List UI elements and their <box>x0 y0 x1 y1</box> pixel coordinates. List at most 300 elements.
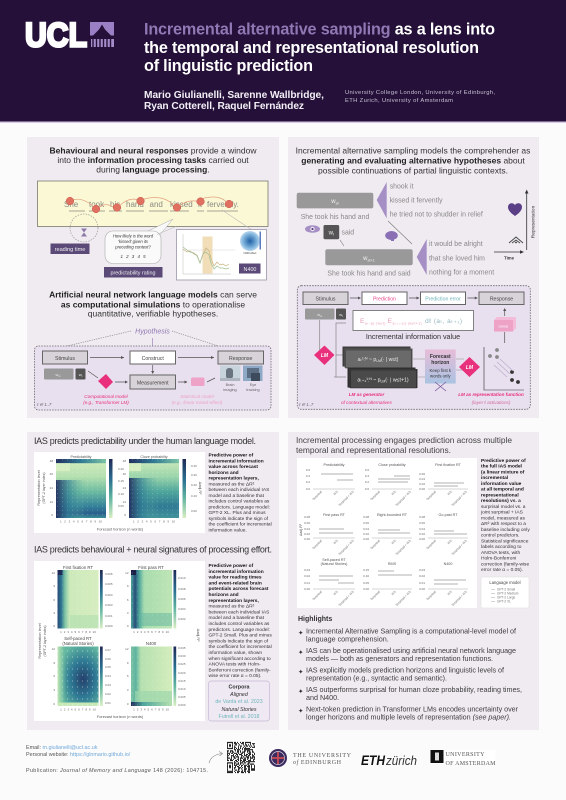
caption: model comparison: surprisal model vs. a <box>481 504 526 510</box>
equation box: E <box>360 318 364 325</box>
chart: first pass RT <box>304 513 355 556</box>
heatmap: N400: 0.035 <box>178 646 186 650</box>
caption: behavioural figure: when significant according to <box>208 656 271 662</box>
diagram: stimulus construct response: Computational model <box>84 394 129 399</box>
diagram: stimulus construct response: Stimulus <box>55 356 75 362</box>
chart: RMS: 0.15 <box>363 568 369 572</box>
heading: IAS models: possible continuations of partial linguistic contexts. <box>318 165 508 175</box>
chart: right-bounded RT: 0.02 <box>363 532 369 536</box>
chart: first fixation RT: Surprisal <box>426 490 437 501</box>
LM as generator: aₜ₊₁¹:ᴺ ~ p <box>357 378 381 384</box>
heatmap: N400: 0.010 <box>178 687 186 691</box>
diagram: stimulus construct response: ℓ ∈ 1..7 <box>36 402 52 407</box>
title: the temporal and representational resolution <box>144 39 479 57</box>
speech bubble: rating question <box>105 219 173 264</box>
arrow to QR code <box>209 752 222 763</box>
label: reading time <box>50 244 90 254</box>
heatmap: self-paced RT: 0 <box>53 702 55 706</box>
legend: language model: GPT-2 Small <box>497 588 515 592</box>
diagram: context w≤t with continuations: shook it <box>390 183 414 190</box>
heading: incremental processing: temporal and representational resolutions. <box>296 445 451 455</box>
caption: predictability figure: Predictive power of <box>208 452 254 458</box>
legend: language model: GPT-2 Large <box>497 596 515 600</box>
panel: multiple resolutions and highlights <box>288 432 539 730</box>
heading: incremental processing: Incremental processing engages prediction across multiple <box>296 435 512 445</box>
chart: first pass RT: 0.06 <box>304 521 310 525</box>
heatmap: first fixation RT: 0.001 <box>105 614 113 618</box>
caption: model comparison: joint surprisal + IAS <box>480 510 524 516</box>
logo: University of Amsterdam: OF AMSTERDAM <box>446 761 496 767</box>
reading sentence box: took <box>89 200 105 209</box>
chart: right-bounded RT: 0.06 <box>363 521 369 525</box>
caption: predictability figure: information value. <box>208 527 247 533</box>
heatmap: cloze probability: 12 <box>123 500 126 504</box>
heading: artificial neural network models: Artificial neural network language models can serve <box>49 290 257 300</box>
reading sentence box: hand <box>126 200 144 209</box>
diagram: stimulus construct response: Response <box>229 356 252 362</box>
chart: go-past RT: 0.00 <box>419 537 425 541</box>
chart: first fixation RT: 0.04 <box>419 477 425 481</box>
caption: model comparison: ANOVA tests, with <box>481 550 521 556</box>
chart: RMS: IAS <box>390 590 397 596</box>
caption: behavioural figure: between each individual IAS <box>208 609 270 615</box>
diagram: context w≤t+1 with continuations: nothing for a moment <box>429 270 494 276</box>
affiliations: University College London, University of Edinburgh, <box>345 90 495 96</box>
current word w_t: w <box>329 230 333 236</box>
reading sentence box: it <box>198 200 203 209</box>
chart: cloze probability <box>365 463 412 507</box>
chart: right-bounded RT: Surprisal <box>370 539 381 550</box>
caption: behavioural figure <box>208 563 272 679</box>
corpora box: Futrell et al. 2018 <box>219 714 260 720</box>
corpora box: de Varda et al. 2023 <box>215 699 263 705</box>
caption: predictability figure: representation layers, <box>208 476 259 482</box>
chart: go-past RT: IAS <box>446 539 453 545</box>
equation box: aₜ~p(·|w≤t) <box>365 322 385 326</box>
heatmap: self-paced RT: 0.06 <box>105 657 111 661</box>
caption: model comparison: incremental <box>481 475 508 481</box>
chart: cloze probability: Surprisal + IAS <box>395 490 412 507</box>
highlights: ✦ <box>298 629 304 637</box>
caption: model comparison: Predictive power of <box>481 458 526 464</box>
diagram: stimulus construct response: imaging <box>223 388 237 392</box>
diagram: context w≤t+1 with continuations: it would be alright <box>429 241 483 248</box>
chart: first pass RT: First pass RT <box>323 513 346 517</box>
heatmap: first fixation RT: 1 2 3 4 5 6 7 8 9 10 <box>60 630 96 634</box>
chart: N400: 0.00 <box>419 587 425 591</box>
LM as generator <box>314 320 418 405</box>
legend: language model <box>481 577 529 608</box>
heatmap: self-paced RT: 0.05 <box>105 665 111 669</box>
chart: cloze probability: 0.2 <box>365 480 369 484</box>
LM as generator: (· | w≤t+1) <box>385 378 409 384</box>
footer: contact and publication: Email: m.giulianelli@ucl.ac.uk <box>26 745 98 751</box>
caption: behavioural figure: value for reading times <box>208 575 262 581</box>
affiliations: ETH Zurich, University of Amsterdam <box>345 98 453 104</box>
heatmap: self-paced RT: 0.03 <box>105 683 111 687</box>
caption: model comparison: the full IAS model <box>481 464 522 470</box>
heatmap: first pass RT: 3 <box>127 611 129 615</box>
heatmap: first fixation RT <box>52 565 113 634</box>
heatmap: predictability <box>50 455 124 524</box>
heatmap: first fixation RT: 0 <box>53 624 55 628</box>
heatmap: N400: 12 <box>125 647 129 651</box>
chart: predictability: IAS <box>332 490 339 496</box>
chart: go-past RT: 0.08 <box>419 515 425 519</box>
title <box>144 20 495 75</box>
caption: model comparison: labels according to <box>481 544 522 550</box>
diagram: context w≤t with continuations: ≤t <box>336 202 340 206</box>
icon: linear model cube: Linear <box>498 324 509 328</box>
heading: IAS predicts behavioural: IAS predicts behavioural + neural signatures of processing effort. <box>34 544 272 554</box>
forecast horizon box: words only <box>430 374 451 378</box>
chart: RMS: RMS <box>388 562 397 566</box>
caption: model comparison: representational <box>481 492 519 498</box>
heatmap: self-paced RT: 0.04 <box>105 674 111 678</box>
speech bubble: rating question: How likely is the word <box>113 234 154 238</box>
heatmap: cloze probability: 0.40 <box>191 464 197 468</box>
icon: statistical model <box>191 378 204 386</box>
panel: behavioural and neural responses <box>27 137 279 418</box>
highlights: ✦ <box>298 688 304 696</box>
figure: predictability heatmaps: Representation level <box>36 470 41 506</box>
chart: N400: Surprisal <box>426 590 437 601</box>
caption: behavioural figure: measured as the ΔR² <box>208 604 255 610</box>
diagram: stimulus construct response: Statistical model <box>180 394 215 399</box>
heading: IAS models <box>296 145 530 175</box>
axes: representation and time: Representation <box>530 205 536 238</box>
heading: behavioural responses <box>50 146 257 174</box>
current word w_t <box>324 221 412 246</box>
caption: behavioural figure: Predictive power of <box>208 563 254 569</box>
heatmap: predictability: 0.15 <box>118 479 124 483</box>
heatmap: first pass RT: 0 <box>127 624 129 628</box>
diagram: prediction pipeline: w <box>317 312 320 317</box>
caption: model comparison <box>480 458 530 573</box>
heatmap: first fixation RT: 0.004 <box>105 593 113 597</box>
logo: University of Amsterdam: UNIVERSITY <box>446 752 485 758</box>
heatmap: self-paced RT: (Natural Stories) <box>62 641 94 646</box>
caption: model comparison: Statistical significance <box>481 538 529 544</box>
reading sentence box: She <box>64 200 79 209</box>
chart: first pass RT: Surprisal <box>312 539 323 550</box>
highlights: ✦ <box>298 648 304 656</box>
heatmap: N400: 0.020 <box>178 671 186 675</box>
current word w_t: said <box>342 230 354 236</box>
equation box <box>353 310 474 330</box>
label: hypothesis with dashed arrows: Hypothesis <box>135 328 170 336</box>
heatmap: cloze probability: Cloze probability <box>140 455 168 459</box>
chart: self-paced RT: (Natural Stories) <box>321 562 347 566</box>
chart: RMS: 0.05 <box>363 581 369 585</box>
caption: predictability figure: predictors. Language model: <box>208 504 270 510</box>
diagram: prediction pipeline: Prediction <box>373 296 396 302</box>
chart: first fixation RT: Surprisal + IAS <box>451 490 468 507</box>
diagram: context w≤t with continuations: he tried not to shudder in relief <box>390 212 483 219</box>
caption: behavioural figure: ANOVA tests with Holm- <box>208 662 261 668</box>
caption: behavioural figure: incremental information <box>208 569 264 575</box>
figure: model comparison charts: Δadj.R² <box>299 523 303 536</box>
equation box: dℓ (aₜ, aₜ₊₁) <box>425 318 462 325</box>
LM as representation function: LM <box>466 365 474 371</box>
diagram: stimulus construct response: ≤t <box>58 375 61 378</box>
legend: language model: GPT-2 Medium <box>497 592 519 596</box>
title: of linguistic prediction <box>144 57 313 75</box>
chart: first fixation RT: 0.06 <box>419 472 425 476</box>
caption: behavioural figure: symbols indicate the sign of <box>208 638 269 644</box>
chart: first fixation RT: 0.02 <box>419 482 425 486</box>
diagram: context w≤t with continuations <box>297 182 483 221</box>
authors: Ryan Cotterell, Raquel Fernández <box>144 101 304 112</box>
chart: predictability: Predictability <box>324 463 345 467</box>
footer: contact and publication: Personal website: https://glnmario.github.io/ <box>26 752 131 758</box>
heatmap: N400: 0.000 <box>178 703 186 707</box>
heatmap: predictability: 0.05 <box>118 504 124 508</box>
heatmap: first pass RT: 1 2 3 4 5 6 7 8 9 10 <box>133 630 169 634</box>
chart: RMS: 0.10 <box>363 574 369 578</box>
chart: N400: 0.02 <box>419 574 425 578</box>
chart: cloze probability: Close probability <box>378 463 406 467</box>
heatmap: self-paced RT: 1 2 3 4 5 6 7 8 9 10 <box>60 708 96 712</box>
photo: eye tracking <box>243 366 262 381</box>
caption: model comparison: Holm-Bonferroni <box>481 556 516 562</box>
chart: N400 waveform: N400 <box>244 267 256 273</box>
chart: first fixation RT: IAS <box>446 490 453 496</box>
chart: self-paced RT: 0.03 <box>304 568 310 572</box>
chart: right-bounded RT: 0.08 <box>363 515 369 519</box>
figure: behavioural and neural heatmaps: Forecast horizon (n words) <box>97 714 144 719</box>
heatmap: first pass RT: 0.002 <box>178 617 186 621</box>
heatmap: cloze probability: 0 <box>124 513 126 517</box>
label: predictability rating: predictability rating <box>111 270 155 276</box>
chart: first pass RT: 0.04 <box>304 527 310 531</box>
chart: predictability: 0.0 <box>306 487 310 491</box>
header banner <box>0 0 566 123</box>
forecast horizon box: horizon <box>431 360 449 366</box>
corpora box: Aligned <box>229 692 249 698</box>
axes: representation and time <box>494 190 536 260</box>
chart: first pass RT: IAS <box>332 539 339 545</box>
caption: model comparison: resolutions) vs. a <box>481 498 521 504</box>
heatmap: N400: 0.015 <box>178 679 186 683</box>
heading: incremental processing <box>296 435 512 455</box>
label: reading time: reading time <box>55 247 85 253</box>
caption: predictability figure: the coefficient for incremental <box>208 522 272 528</box>
icon: eye <box>305 225 320 233</box>
diagram: stimulus construct response <box>34 346 271 410</box>
chart: predictability <box>306 463 355 507</box>
LM as representation function <box>458 347 524 405</box>
chart: cloze probability: Surprisal <box>370 490 381 501</box>
heatmap: cloze probability: 48 <box>123 459 126 463</box>
heading: IAS models: generating and evaluating alternative hypotheses about <box>301 155 525 165</box>
chart: first pass RT: 0.02 <box>304 532 310 536</box>
caption: model comparison: (a linear mixture of <box>481 470 525 476</box>
highlights: ✦ <box>298 668 304 676</box>
heading: IAS models: Incremental alternative sampling models the comprehender as <box>296 145 530 155</box>
affiliations <box>345 90 495 104</box>
corpora box: Corpora <box>229 684 250 690</box>
chart: predictability: Surprisal <box>312 490 323 501</box>
logo: ETH Zurich: zürich <box>385 754 417 768</box>
diagram: prediction pipeline: Response <box>490 296 513 302</box>
highlights: Incremental Alternative Sampling is a computational-level model of <box>306 626 516 636</box>
chart: predictability: 0.2 <box>306 480 310 484</box>
heatmap: N400: 0.030 <box>178 654 186 658</box>
highlights: language comprehension. <box>306 634 389 644</box>
heading: artificial neural network models <box>49 290 257 319</box>
chart: self-paced RT: IAS <box>332 590 339 596</box>
chart: N400: Surprisal + IAS <box>451 590 468 607</box>
chart: predictability: 0.4 <box>306 474 310 478</box>
chart: go-past RT: 0.06 <box>419 521 425 525</box>
icon: syntax tree mountain <box>509 237 523 243</box>
heatmap: N400: 3 <box>127 688 129 692</box>
heatmap: predictability: Predictability <box>71 455 92 459</box>
chart: right-bounded RT: Right-bounded RT <box>377 513 408 517</box>
logo: University of Edinburgh <box>269 749 352 767</box>
footer: contact and publication <box>26 745 208 774</box>
heatmap: first pass RT: First pass RT <box>138 565 164 570</box>
heatmap: self-paced RT: 0.01 <box>105 701 111 705</box>
label: hypothesis with dashed arrows <box>67 328 218 350</box>
caption: predictability figure: includes control variables as <box>208 498 270 504</box>
reading sentence box: and <box>150 200 163 209</box>
heading: IAS predicts predictability: IAS predicts predictability under the human language model. <box>34 436 256 446</box>
LM as generator: aₜ¹:ᴺ ~ p <box>358 357 376 363</box>
heatmap: first pass RT: 9 <box>127 584 129 588</box>
highlights: IAS explicitly models prediction horizons and linguistic levels of <box>306 666 504 674</box>
chart: right-bounded RT <box>363 513 412 556</box>
caption: behavioural figure: includes control variables as <box>208 621 270 627</box>
caption: predictability figure: horizons and <box>208 470 239 476</box>
heatmap: self-paced RT: 0.02 <box>105 692 111 696</box>
chart: first fixation RT <box>419 463 468 507</box>
panel: incremental alternative sampling <box>288 137 539 418</box>
caption: behavioural figure: and event-related brain <box>208 580 262 586</box>
heatmap: cloze probability: 0.20 <box>191 483 197 487</box>
heatmap: self-paced RT: 9 <box>53 661 55 665</box>
figure: behavioural and neural heatmaps <box>34 561 205 721</box>
heatmap: predictability: 24 <box>50 486 53 490</box>
title: Incremental alternative sampling as a lens into <box>144 20 495 38</box>
diagram: stimulus construct response: Eye <box>250 383 256 387</box>
LM as generator: LM <box>321 353 329 359</box>
heatmap: N400 <box>125 641 186 712</box>
caption: behavioural figure: information value, shown <box>208 650 262 656</box>
figure: predictability heatmaps: (GPT-2 layer index) <box>42 472 46 504</box>
heatmap: N400: 0.025 <box>178 662 186 666</box>
diagram: prediction pipeline: Stimulus <box>316 296 336 302</box>
diagram: prediction pipeline <box>297 286 530 409</box>
heatmap: first fixation RT: 0.006 <box>105 572 113 576</box>
caption: predictability figure: incremental information <box>208 458 264 464</box>
heatmap: N400: 0.005 <box>178 695 186 699</box>
heatmap: N400: 1 2 3 4 5 6 7 8 9 10 <box>133 708 169 712</box>
LM as generator: LM as generator <box>349 392 384 397</box>
chart: self-paced RT: 0.01 <box>304 581 310 585</box>
diagram: context w≤t+1 with continuations: that she loved him <box>429 255 485 262</box>
caption: model comparison: model, measured as <box>481 516 525 522</box>
diagram: context w≤t+1 with continuations: ≤t+1 <box>367 258 375 262</box>
heatmap: self-paced RT: 3 <box>53 688 55 692</box>
icon: brain <box>385 231 398 241</box>
chart: predictability: 0.6 <box>306 468 310 472</box>
reading sentence box: kissed <box>170 200 193 209</box>
chart: right-bounded RT: 0.00 <box>363 537 369 541</box>
figure: predictability heatmaps <box>34 452 205 533</box>
legend: language model: Language model <box>489 580 521 585</box>
heatmap: first pass RT <box>125 565 186 634</box>
icon: linear model cube <box>494 317 516 332</box>
heatmap: first fixation RT: 12 <box>52 571 55 575</box>
diagram: stimulus construct response: (e.g., linear mixed-effect) <box>172 400 223 405</box>
forecast horizon box: Forecast <box>430 354 451 360</box>
chart: N400: N400 <box>444 562 452 566</box>
chart: RMS: Surprisal <box>370 590 381 601</box>
highlights: longer horizons and multiple levels of representation (see paper). <box>306 712 511 722</box>
highlights: representation (e.g., syntactic and semantic). <box>306 674 447 682</box>
diagram: context w≤t with continuations: w <box>331 199 336 205</box>
diagram: stimulus construct response: w <box>79 372 82 377</box>
heatmap: first fixation RT: 9 <box>53 584 55 588</box>
diagram: stimulus construct response: Brain <box>226 383 234 387</box>
heatmap: first pass RT: 0.004 <box>178 607 186 611</box>
heatmap: first pass RT: 0.006 <box>178 597 186 601</box>
caption: predictability figure: value across forecast <box>208 464 258 470</box>
heatmap: first fixation RT: 0.005 <box>105 582 113 586</box>
caption: behavioural figure: potentials across forecast <box>208 586 269 592</box>
heading: behavioural responses: Behavioural and neural responses provide a window <box>50 146 257 156</box>
heatmap: self-paced RT: 6 <box>53 674 55 678</box>
QR code <box>226 742 256 773</box>
speech bubble: rating question: preceding context? <box>114 244 151 250</box>
logo: University of Edinburgh: THE UNIVERSITY <box>293 753 352 759</box>
heatmap: N400: 9 <box>127 661 129 665</box>
chart: first fixation RT: First fixation RT <box>435 463 462 467</box>
logo: ETH Zurich: ETH <box>361 753 385 768</box>
chart: N400: 0.01 <box>419 581 425 585</box>
chart: cloze probability: IAS <box>390 490 397 496</box>
caption: behavioural figure: model and a baseline that <box>208 615 265 621</box>
chart: right-bounded RT: IAS <box>390 539 397 545</box>
LM as representation function: (layer ℓ activations) <box>472 400 511 405</box>
chart: RMS: 0.00 <box>363 587 369 591</box>
heatmap: predictability: 0.20 <box>118 467 124 471</box>
caption: predictability figure: GPT-2 XL. Plus and minus <box>208 510 266 516</box>
forecast horizon box: Keep first k <box>430 368 452 373</box>
caption: behavioural figure: representation layers, <box>208 598 259 604</box>
diagram: context w≤t+1 with continuations: She took his hand and said <box>327 270 411 278</box>
heatmap: first fixation RT: First fixation RT <box>63 565 93 570</box>
heatmap: first fixation RT: 0.000 <box>105 624 113 628</box>
chart: go-past RT: Go-past RT <box>438 513 458 517</box>
figure: behavioural and neural heatmaps: Δadj.R² <box>196 629 200 642</box>
heatmap: predictability: 48 <box>50 459 53 463</box>
label: incremental information value: Incremental information value <box>366 332 460 341</box>
heatmap: cloze probability: 0.00 <box>191 509 197 513</box>
logo: UCL: UCL <box>25 16 87 54</box>
forecast horizon box <box>413 350 464 391</box>
heading: artificial neural network models: quantitative, verifiable hypotheses. <box>88 309 218 319</box>
highlights: IAS outperforms surprisal for human cloze probability, reading times, <box>306 685 522 694</box>
equation box: E <box>388 318 392 325</box>
diagram: prediction pipeline: w <box>339 312 342 317</box>
heatmap: predictability: 0.10 <box>118 492 124 496</box>
corpora box: Natural Stories <box>221 707 257 713</box>
heatmap: cloze probability <box>123 455 197 524</box>
chart: first pass RT: 0.00 <box>304 537 310 541</box>
